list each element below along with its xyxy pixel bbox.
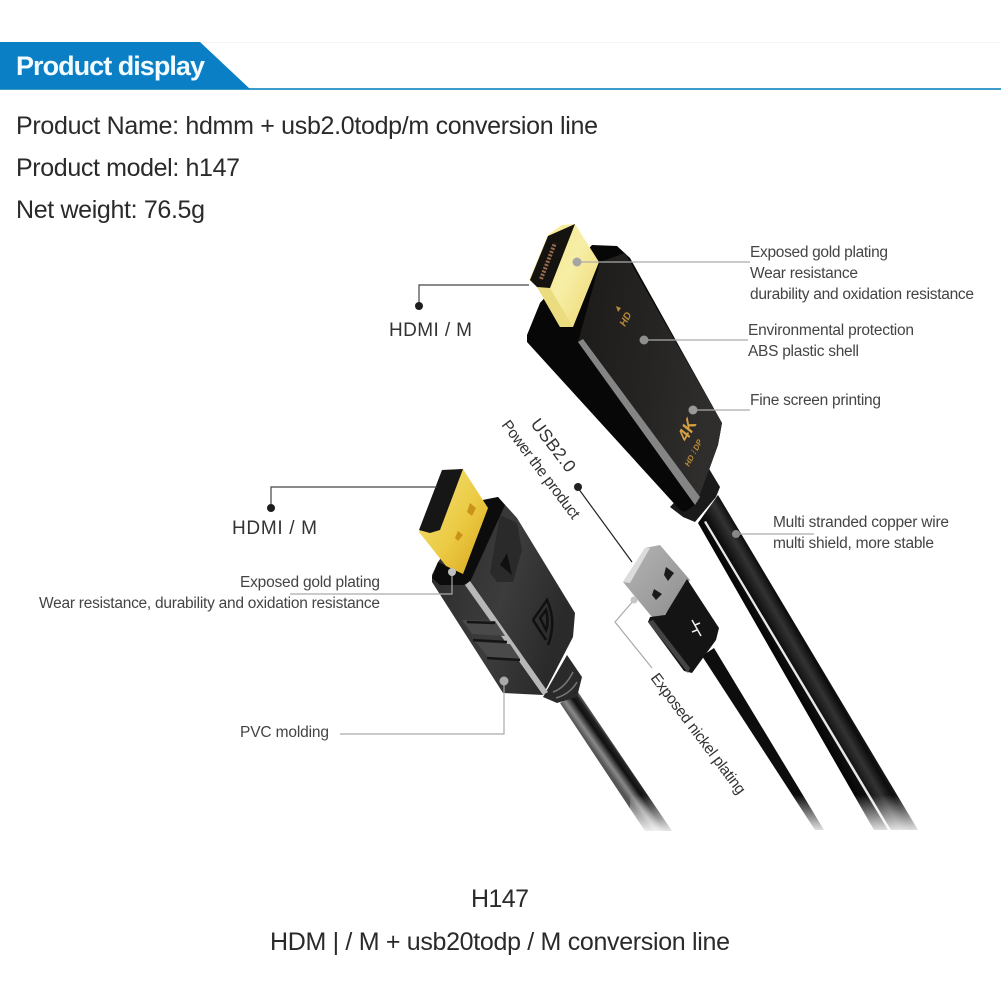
footer model caption: HDM | / M + usb20todp / M conversion line bbox=[270, 928, 730, 956]
product specification text bbox=[16, 112, 598, 224]
footer model caption bbox=[270, 885, 730, 956]
callout: exposed gold plating right: Wear resistance bbox=[750, 265, 858, 282]
USB symbol bbox=[692, 620, 701, 636]
callout: exposed gold plating left: Exposed gold plating bbox=[240, 574, 380, 591]
release button bbox=[490, 515, 522, 582]
HDMI plug housing bbox=[527, 245, 722, 512]
callout: HDMI M lower bbox=[232, 487, 437, 539]
USB plug bbox=[623, 545, 719, 673]
HDMI plug housing: HD ⫶ DP bbox=[683, 437, 705, 468]
HDMI plug strain relief bbox=[670, 467, 720, 522]
product specification text: Product model: h147 bbox=[16, 154, 240, 182]
callout: fine screen printing: Fine screen printing bbox=[750, 392, 881, 409]
callout: copper wire: Multi stranded copper wire bbox=[773, 514, 949, 531]
product specification text: Net weight: 76.5g bbox=[16, 196, 205, 224]
callout: ABS shell bbox=[640, 322, 914, 360]
callout: PVC molding bbox=[240, 676, 508, 741]
callout: fine screen printing bbox=[688, 392, 881, 414]
HDMI gold connector bbox=[529, 224, 599, 327]
DP strain relief bbox=[543, 655, 582, 703]
callout: exposed gold plating left bbox=[39, 568, 456, 612]
DP logo bbox=[533, 600, 552, 645]
heading: Product display bbox=[16, 51, 205, 81]
callout: copper wire bbox=[732, 514, 949, 552]
callout: exposed gold plating right: durability and oxidation resistance bbox=[750, 286, 974, 303]
product specification text: Product Name: hdmm + usb2.0todp/m conversion line bbox=[16, 112, 598, 140]
callout: USB2.0: USB2.0 bbox=[527, 414, 580, 476]
callout: exposed nickel plating bbox=[615, 596, 749, 798]
callout: ABS shell: Environmental protection bbox=[748, 322, 914, 339]
callout: USB2.0 bbox=[498, 414, 632, 562]
USB cable bbox=[702, 648, 824, 830]
callout: exposed gold plating right bbox=[572, 244, 974, 303]
callout: exposed nickel plating: Exposed nickel plating bbox=[647, 670, 749, 798]
DP plug housing bbox=[432, 497, 575, 695]
4K screen print: 4K bbox=[673, 414, 702, 445]
callout: exposed gold plating right: Exposed gold plating bbox=[750, 244, 888, 261]
callout: HDMI M lower: HDMI / M bbox=[232, 518, 317, 539]
DP cable bbox=[560, 692, 672, 831]
header banner bbox=[0, 42, 1001, 90]
cable fade-out bbox=[630, 795, 930, 832]
callout: exposed gold plating left: Wear resistance, durability and oxidation resistance bbox=[39, 595, 380, 612]
callout: ABS shell: ABS plastic shell bbox=[748, 343, 859, 360]
callout: HDMI M upper: HDMI / M bbox=[389, 320, 472, 341]
HDMI to DP cable: main cable bbox=[698, 495, 918, 830]
footer model caption: H147 bbox=[471, 885, 529, 913]
callout: copper wire: multi shield, more stable bbox=[773, 535, 934, 552]
connector pins bbox=[541, 243, 555, 279]
HD screen print: HD bbox=[618, 310, 634, 328]
callout: USB2.0: Power the product bbox=[498, 417, 583, 523]
DP gold connector bbox=[419, 469, 488, 574]
callout: HDMI M upper bbox=[389, 285, 529, 341]
callout: PVC molding: PVC molding bbox=[240, 724, 329, 741]
